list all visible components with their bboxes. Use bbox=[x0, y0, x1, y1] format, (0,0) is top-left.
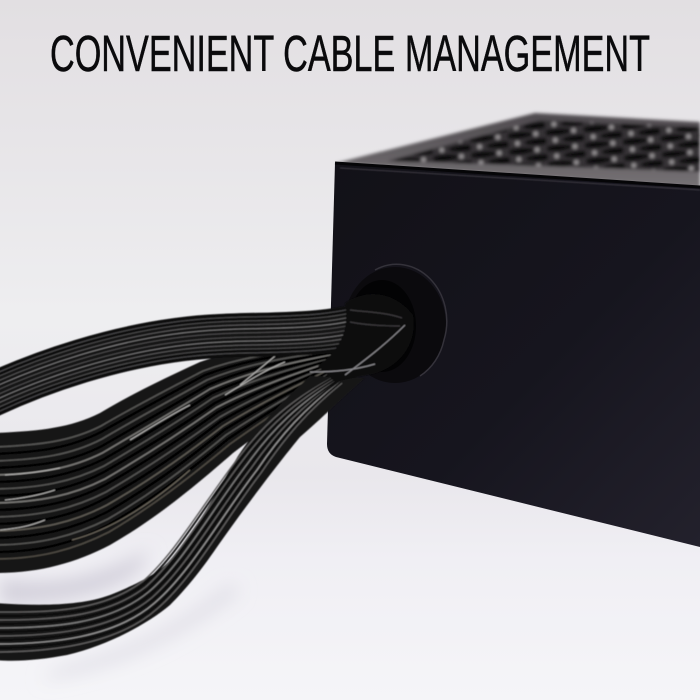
cable bundle: lower loop bbox=[0, 376, 365, 661]
cable bundle: top arc bbox=[0, 318, 385, 416]
soft cable shadows on table bbox=[0, 550, 240, 680]
cable knot at grommet bbox=[310, 294, 414, 382]
power supply unit bbox=[327, 113, 700, 547]
strand highlights bbox=[0, 352, 285, 530]
top front edge bbox=[335, 163, 700, 187]
cable bundles bbox=[0, 294, 414, 661]
top face with fan mesh bbox=[336, 113, 700, 188]
rubber grommet bbox=[344, 264, 447, 383]
cable bundle: middle mass bbox=[0, 345, 345, 573]
lobe highlight lines bbox=[72, 470, 190, 540]
front face bbox=[327, 163, 700, 547]
edge highlight bbox=[340, 168, 700, 190]
